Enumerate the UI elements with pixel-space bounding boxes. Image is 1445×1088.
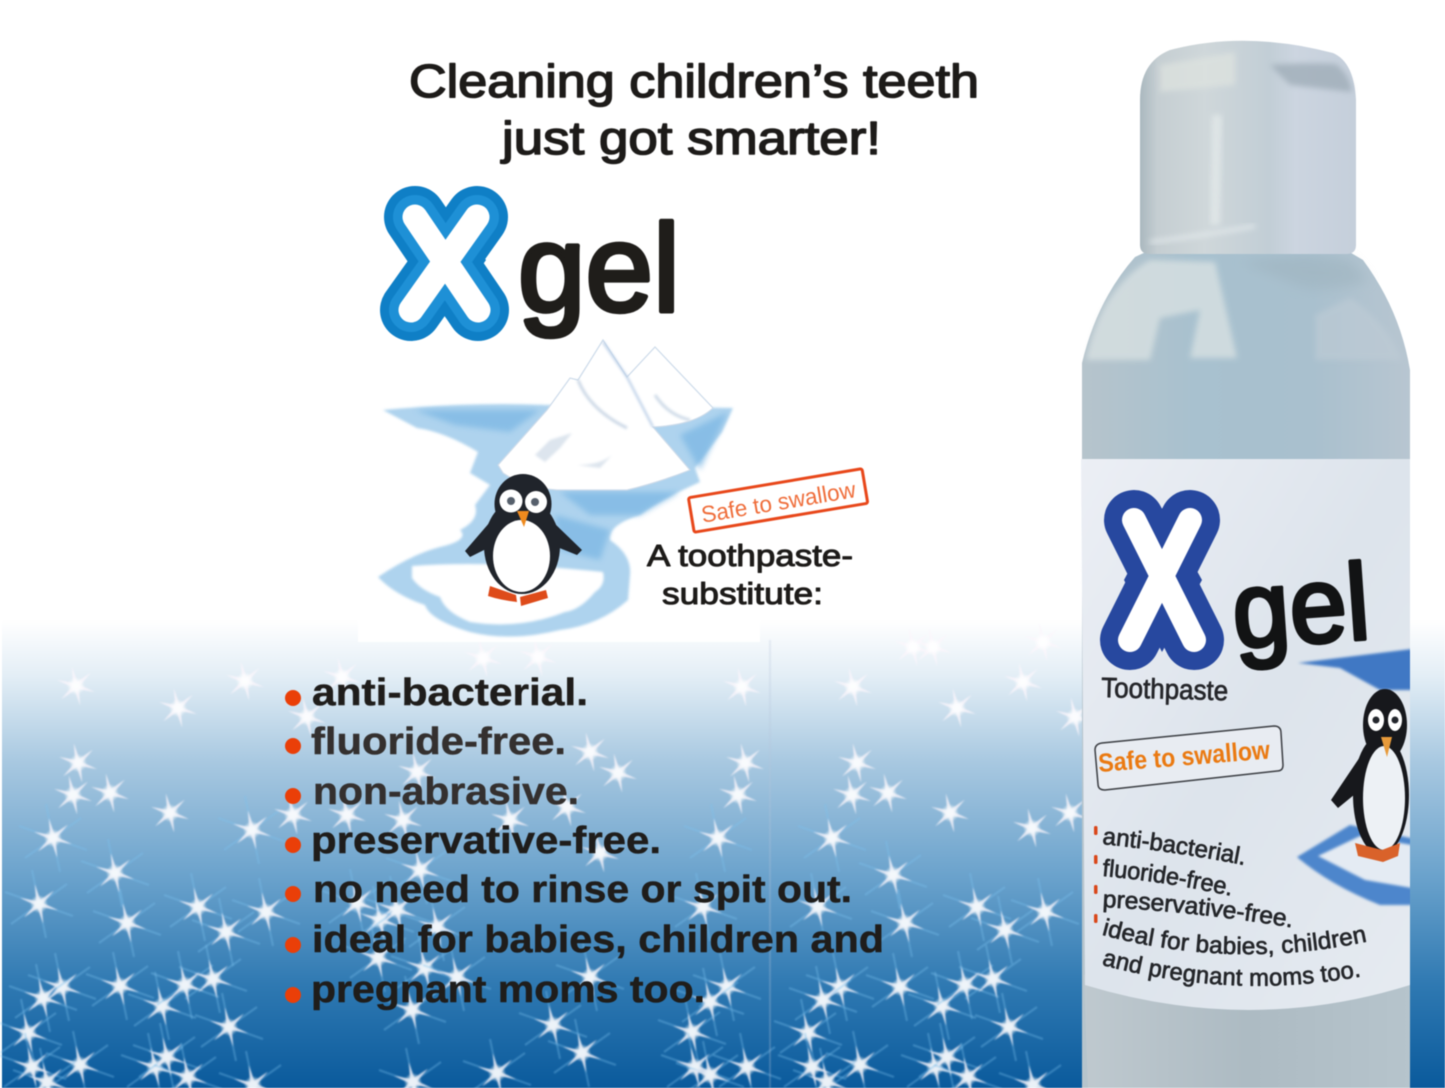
ice floe	[412, 564, 604, 624]
label list text: preservative-free.	[1102, 893, 1292, 928]
illustration: iceberg and penguin	[378, 340, 733, 637]
title: just got smarter!	[500, 112, 881, 164]
iceberg	[498, 340, 713, 490]
Xgel logo	[407, 200, 680, 338]
subtitle: substitute:	[662, 576, 823, 611]
sparkle stars	[0, 622, 1095, 1088]
stamp: safe to swallow: Safe to swallow	[699, 476, 858, 528]
label stamp	[1095, 726, 1283, 790]
white panel behind illustration	[358, 610, 760, 642]
label list text: ideal for babies, children	[1102, 917, 1367, 958]
list text: no need to rinse or spit out.	[313, 869, 852, 911]
list text: ideal for babies, children and	[312, 919, 884, 961]
list text: non-abrasive.	[313, 771, 579, 813]
label word Toothpaste: Toothpaste	[1101, 672, 1229, 706]
darker water patches	[415, 410, 728, 560]
subtitle	[647, 538, 853, 611]
label X mark	[1124, 508, 1202, 652]
list text	[311, 672, 884, 1011]
label word gel: gel	[1228, 541, 1373, 671]
water	[378, 404, 733, 637]
benefits list	[285, 672, 884, 1011]
bottle cap	[1140, 41, 1356, 254]
list text: pregnant moms too.	[311, 969, 705, 1011]
label list text	[1102, 830, 1367, 988]
bottle base	[1084, 975, 1410, 1088]
label list text: anti-bacterial.	[1102, 830, 1244, 866]
logo X mark	[407, 208, 486, 318]
list text: preservative-free.	[311, 820, 661, 862]
logo word gel: gel	[518, 200, 680, 338]
subtitle: A toothpaste-	[647, 538, 853, 573]
background gradient panel	[2, 620, 1445, 1088]
label list text: and pregnant moms too.	[1102, 952, 1360, 988]
title: Cleaning children’s teeth	[409, 55, 979, 107]
label illustration	[1297, 648, 1420, 905]
label bullets	[1094, 826, 1098, 923]
list text: anti-bacterial.	[312, 672, 588, 714]
list text: fluoride-free.	[311, 721, 566, 763]
penguin	[465, 474, 582, 606]
label stamp: Safe to swallow	[1097, 735, 1272, 778]
bottle	[1081, 40, 1411, 1088]
title	[409, 55, 979, 164]
bottle shoulder and body	[1082, 250, 1410, 1088]
bottle label	[1082, 458, 1411, 1010]
bullets	[285, 690, 301, 1003]
label list text: fluoride-free.	[1102, 858, 1231, 896]
